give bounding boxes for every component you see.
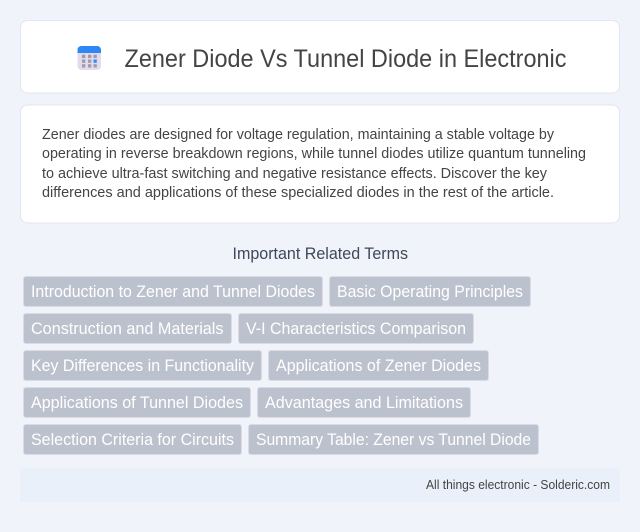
text block: intro paragraph: to achieve ultra-fast switching and negative resistance effects. Discover the key	[42, 165, 547, 182]
tag: zener applications: Applications of Zener Diodes	[276, 356, 481, 375]
text block: intro paragraph: Zener diodes are designed for voltage regulation, maintaining a stable voltage by	[42, 126, 554, 143]
tag list	[24, 276, 538, 454]
tag: operating principles: Basic Operating Principles	[337, 282, 523, 301]
footer	[20, 468, 620, 502]
tag: introduction: Introduction to Zener and Tunnel Diodes	[31, 282, 315, 301]
tag: summary table: Summary Table: Zener vs Tunnel Diode	[256, 430, 531, 449]
tag: summary table	[248, 424, 538, 454]
text block: intro paragraph: operating in reverse breakdown regions, while tunnel diodes utilize quantum tunneling	[42, 145, 586, 162]
text block: intro paragraph: differences and applications of these specialized diodes in the rest of the article.	[42, 184, 554, 201]
panel: header	[20, 20, 620, 93]
tag: construction: Construction and Materials	[31, 319, 224, 338]
tag: v-i characteristics	[238, 314, 474, 344]
panel: intro	[20, 105, 620, 223]
title: Zener Diode Vs Tunnel Diode in Electronic	[124, 46, 566, 73]
tag: selection criteria	[24, 424, 242, 454]
tag: advantages	[258, 388, 470, 418]
icon: calendar	[78, 46, 101, 70]
tag: operating principles	[330, 276, 530, 306]
tag: key differences: Key Differences in Functionality	[31, 356, 255, 375]
tag: construction	[24, 314, 232, 344]
tag: selection criteria: Selection Criteria for Circuits	[31, 430, 234, 449]
tag: tunnel applications: Applications of Tunnel Diodes	[31, 393, 243, 412]
tag: tunnel applications	[24, 388, 250, 418]
tag: key differences	[24, 350, 262, 380]
tag: v-i characteristics: V-I Characteristics Comparison	[246, 319, 466, 338]
tag: introduction	[24, 276, 322, 306]
tag: advantages: Advantages and Limitations	[265, 393, 463, 412]
text block: intro paragraph	[42, 126, 586, 201]
tag: zener applications	[268, 350, 488, 380]
footer credit: All things electronic - Solderic.com	[426, 478, 610, 492]
heading: related terms: Important Related Terms	[232, 245, 408, 263]
